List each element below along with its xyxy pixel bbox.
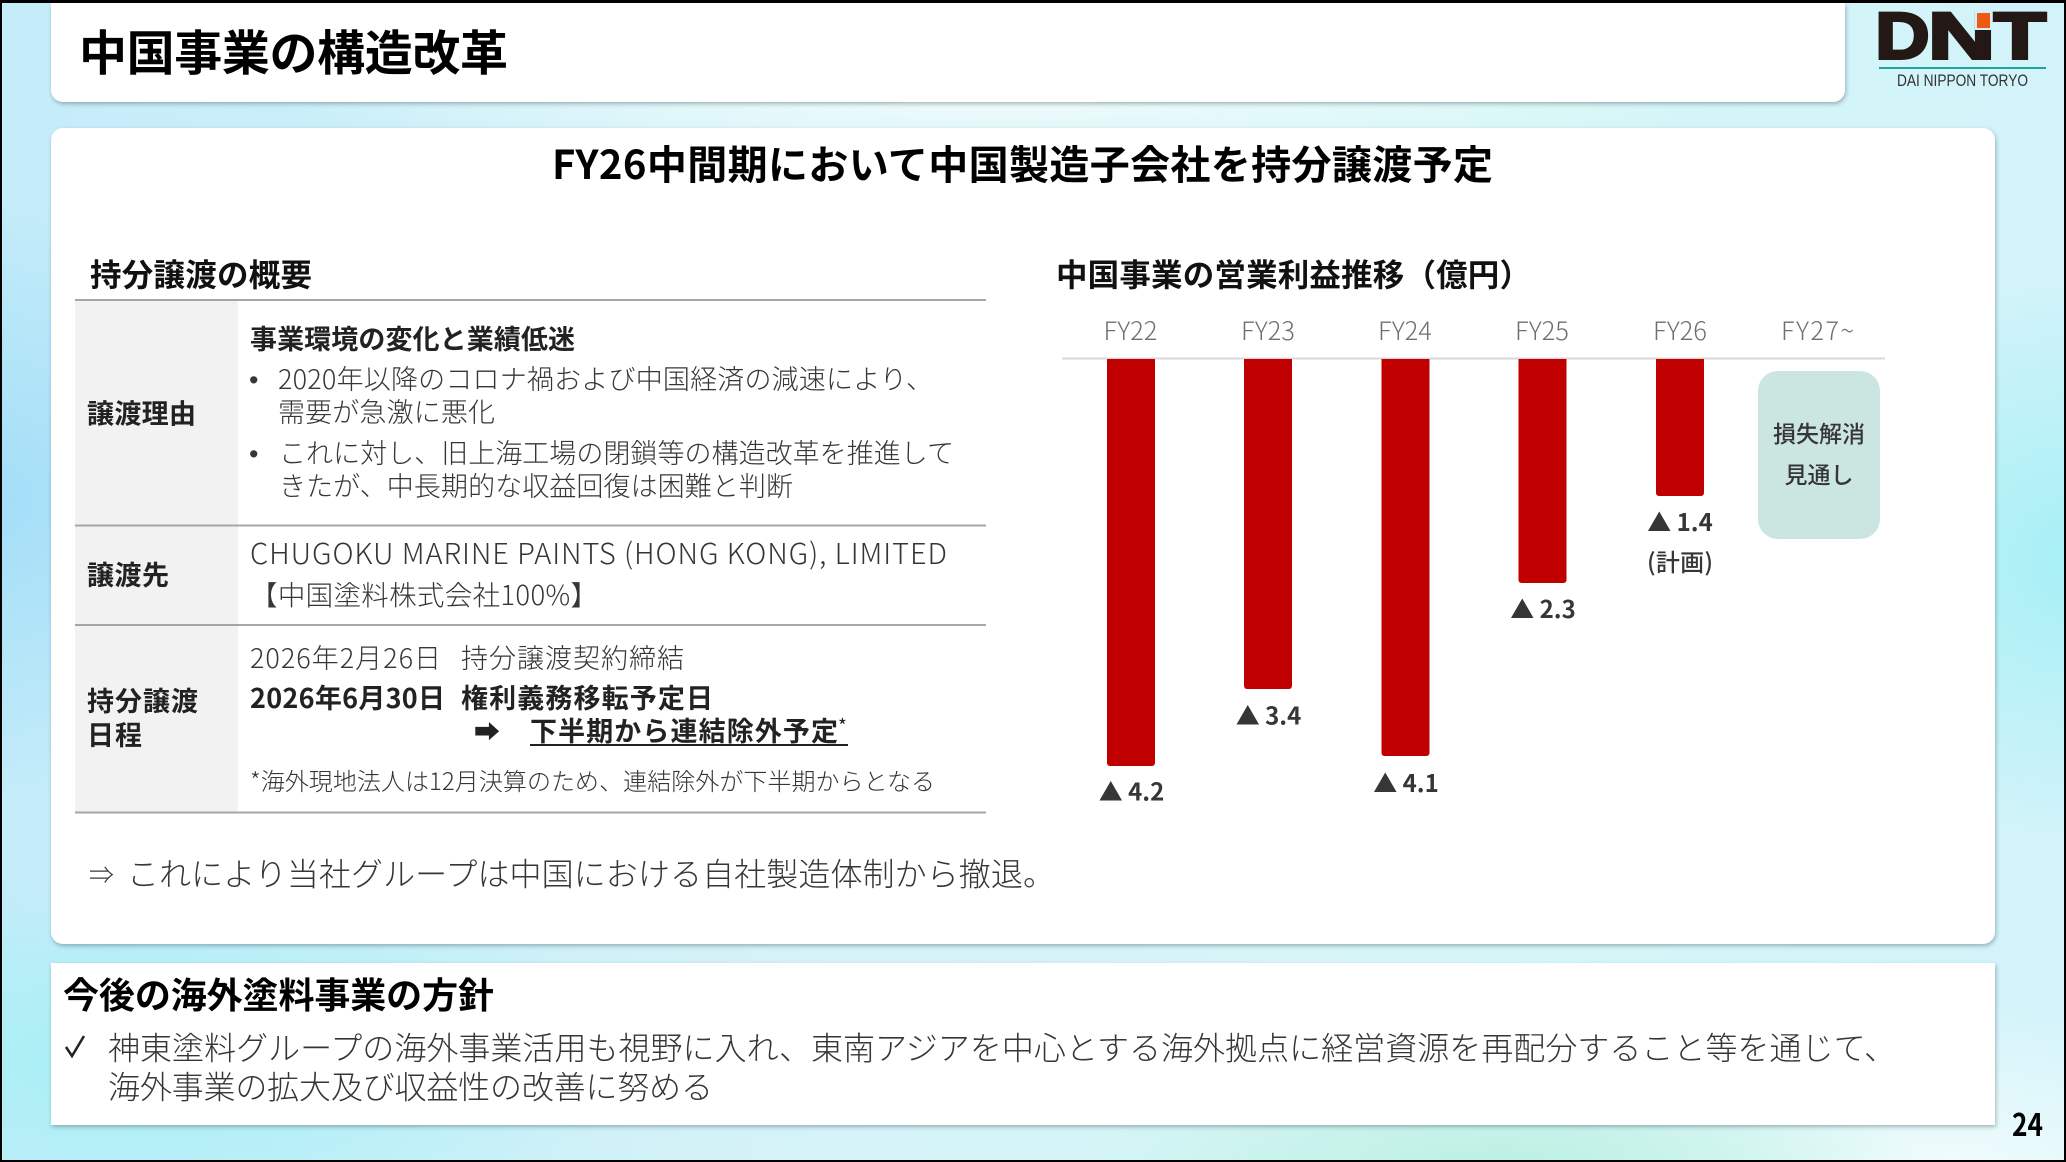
policy heading: 今後の海外塗料事業の方針 [63, 967, 494, 1019]
bar: FY26: ▲ 1.4 [1647, 503, 1713, 538]
bar: FY26 [1647, 311, 1713, 578]
bar: FY26: (計画) [1647, 543, 1713, 578]
conclusion note: ⇒ [89, 856, 114, 892]
column: FY27 onward: FY27~ [1781, 311, 1854, 348]
bar: FY25 [1510, 311, 1576, 625]
panel: future overseas policy [51, 963, 1995, 1125]
column: FY27 onward: 見通し [1784, 456, 1854, 490]
row: reason: 事業環境の変化と業績低迷 [250, 318, 575, 357]
bar: FY25: ▲ 2.3 [1510, 590, 1576, 625]
icon: check mark [66, 1036, 84, 1056]
bar: FY23 [1236, 311, 1301, 732]
logo: DNT: DAI NIPPON TORYO [1897, 71, 2028, 90]
panel: main [51, 128, 1995, 944]
bar: FY22: FY22 [1104, 311, 1157, 348]
row: transferee [87, 531, 947, 613]
row: transferee: 譲渡先 [87, 554, 169, 593]
row: schedule: 下半期から連結除外予定 [530, 710, 838, 749]
row: transferee: 【中国塗料株式会社100%】 [250, 573, 598, 613]
bar: FY24 [1373, 311, 1439, 799]
row: schedule [87, 637, 935, 797]
row: reason: 2020年以降のコロナ禍および中国経済の減速により、 [278, 358, 933, 397]
row: reason: 需要が急激に悪化 [278, 391, 495, 430]
conclusion note: これにより当社グループは中国における自社製造体制から撤退。 [127, 850, 1055, 896]
row: transferee: CHUGOKU MARINE PAINTS (HONG KONG), LIMITED [250, 531, 947, 573]
title: 中国事業の構造改革 [79, 14, 508, 84]
column: FY27 onward: 損失解消 [1773, 415, 1865, 449]
row: schedule: * [838, 712, 847, 739]
column: FY27 onward [1758, 311, 1880, 539]
chart heading: 中国事業の営業利益推移（億円） [1056, 250, 1531, 296]
row: reason [87, 318, 954, 504]
policy text: 海外事業の拡大及び収益性の改善に努める [108, 1062, 713, 1108]
row: schedule: 持分譲渡契約締結 [461, 637, 684, 676]
row: schedule: ➡ [474, 712, 500, 749]
policy text [108, 1024, 1896, 1108]
logo: DNT: T [1994, 0, 2046, 73]
row: reason: きたが、中長期的な収益回復は困難と判断 [279, 465, 793, 504]
logo: DNT: D [1875, 0, 1930, 72]
row: schedule: 持分譲渡 [87, 680, 198, 719]
overview table [75, 299, 986, 814]
bar: FY23: ▲ 3.4 [1236, 696, 1301, 732]
logo: DNT [1875, 0, 2046, 90]
bar: FY24: ▲ 4.1 [1373, 764, 1439, 799]
row: reason: • [249, 365, 258, 395]
row: reason: • [249, 439, 258, 469]
row: schedule: 権利義務移転予定日 [461, 677, 713, 716]
bar: FY23: FY23 [1241, 311, 1295, 348]
bar: FY24: FY24 [1378, 311, 1432, 348]
logo: DNT: N [1928, 0, 1995, 73]
row: reason: これに対し、旧上海工場の閉鎖等の構造改革を推進して [279, 432, 954, 471]
section heading: transfer overview: 持分譲渡の概要 [90, 250, 312, 296]
title panel [51, 3, 1845, 102]
bar: FY22: ▲ 4.2 [1099, 772, 1164, 808]
bar chart: operating profit [1062, 311, 1885, 808]
row: reason: 譲渡理由 [87, 392, 196, 432]
row: schedule: *海外現地法人は12月決算のため、連結除外が下半期からとなる [250, 762, 935, 797]
policy text: 神東塗料グループの海外事業活用も視野に入れ、東南アジアを中心とする海外拠点に経営資源を再配分すること等を通じて、 [108, 1024, 1896, 1070]
bar: FY25: FY25 [1515, 311, 1569, 348]
page number: 24 [2012, 1100, 2043, 1145]
main heading: FY26中間期において中国製造子会社を持分譲渡予定 [552, 133, 1493, 191]
bar: FY22 [1099, 311, 1164, 808]
row: schedule: 2026年2月26日 [250, 637, 441, 676]
row: schedule: 2026年6月30日 [250, 677, 445, 716]
bar: FY26: FY26 [1653, 311, 1707, 348]
row: schedule: 日程 [87, 714, 142, 753]
